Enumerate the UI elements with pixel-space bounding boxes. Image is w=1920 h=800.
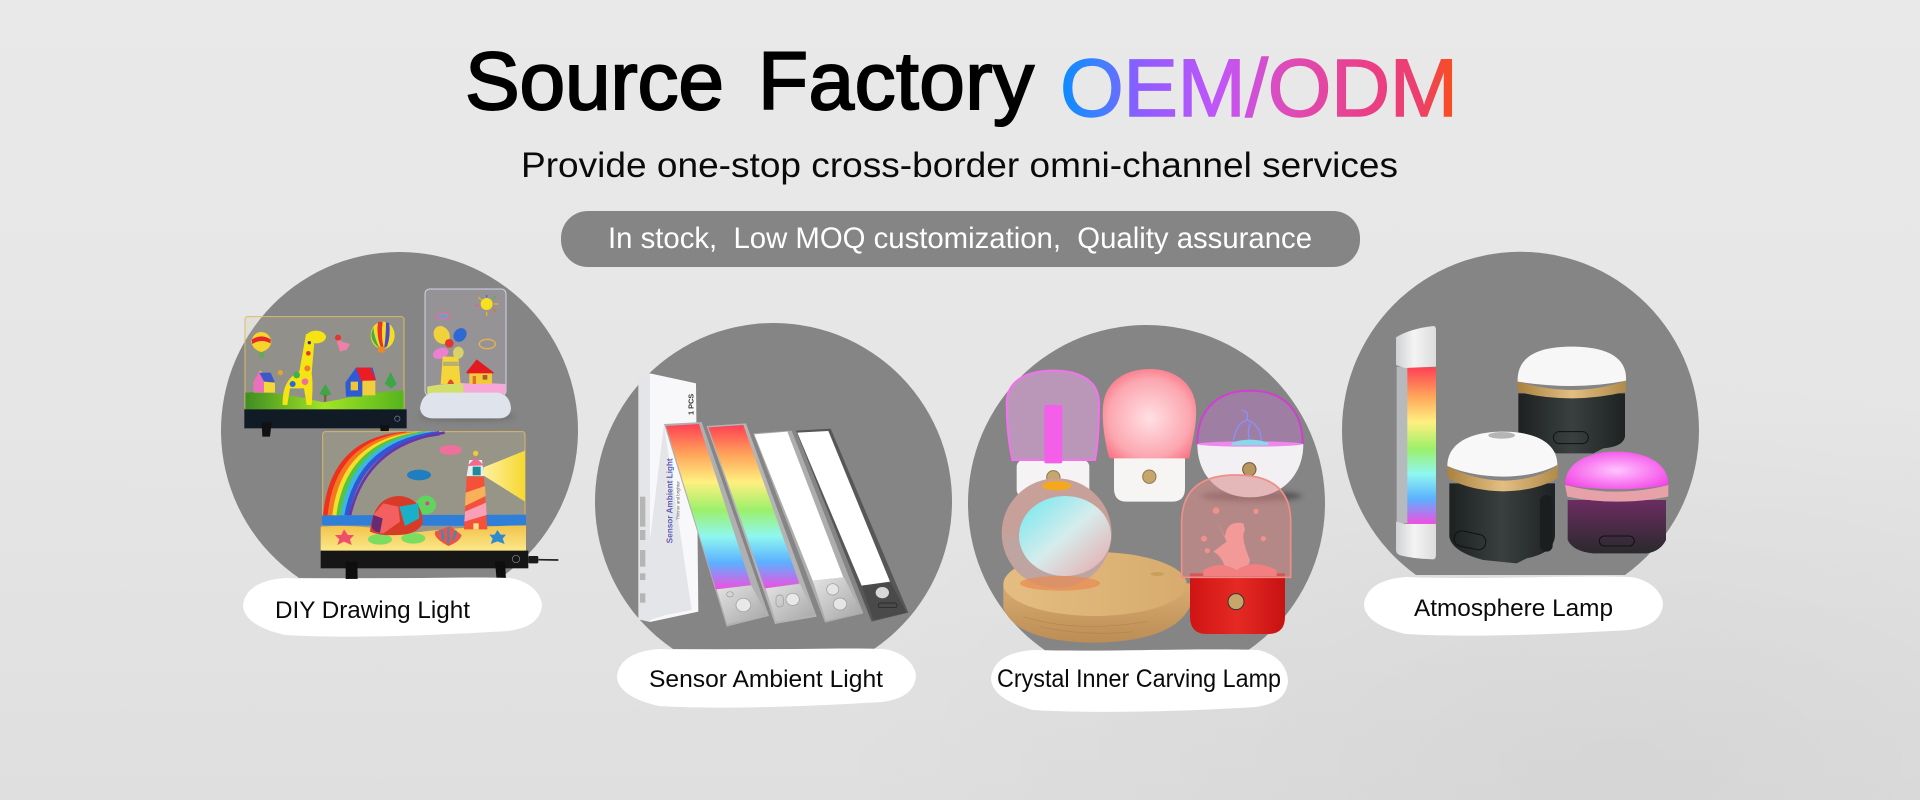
bar 3 — [753, 431, 863, 623]
base C — [321, 551, 528, 568]
title — [465, 36, 1458, 134]
panel: Sensor Ambient Light — [595, 323, 952, 708]
product: atmosphere lamps — [1396, 326, 1668, 563]
product: sensor bars and box: 1 PCS — [686, 394, 695, 415]
bar 2 — [707, 423, 817, 624]
gray circle — [221, 252, 578, 578]
crystal ball — [1002, 478, 1112, 591]
title: Factory — [758, 36, 1034, 127]
lamp C bowl — [1197, 391, 1303, 501]
gray circle — [968, 325, 1325, 651]
label: Sensor Ambient Light: Sensor Ambient Light — [649, 666, 883, 693]
box text: Sensor Ambient Light — [664, 458, 674, 543]
title: Source — [465, 36, 724, 127]
product: sensor bars and box — [638, 373, 908, 627]
panel A — [245, 317, 404, 410]
label: Sensor Ambient Light — [617, 649, 916, 708]
product: drawing lights — [244, 289, 558, 580]
panel B — [425, 289, 506, 396]
base A — [244, 409, 407, 428]
title: OEM/ODM gradient: OEM/ODM — [1060, 43, 1458, 134]
panel C — [323, 432, 525, 551]
box side marks — [640, 497, 645, 603]
base B — [420, 393, 511, 418]
gray circle — [1342, 252, 1699, 575]
wood base — [1003, 552, 1190, 643]
panel: DIY Drawing Light — [221, 252, 578, 637]
label: Crystal Inner Carving Lamp: Crystal Inner Carving Lamp — [997, 665, 1281, 693]
bar 4 — [796, 429, 908, 622]
lamp 2 front — [1447, 432, 1558, 563]
label: DIY Drawing Light — [243, 578, 542, 637]
lamp B coral — [1103, 369, 1196, 502]
pill banner — [561, 211, 1360, 267]
lamp 3 pink — [1565, 452, 1668, 553]
product: sensor bars and box: Thinner and brighter — [675, 480, 680, 520]
panel B shadow — [418, 413, 515, 421]
label: Crystal Inner Carving Lamp — [991, 649, 1288, 712]
label: Atmosphere Lamp — [1364, 577, 1663, 636]
product: crystal lamps — [1002, 369, 1303, 643]
box — [638, 373, 650, 622]
panel: Atmosphere Lamp — [1342, 252, 1699, 636]
label: Atmosphere Lamp: Atmosphere Lamp — [1414, 595, 1613, 622]
bar 1 — [664, 422, 769, 627]
gray circle — [595, 323, 952, 649]
panel: Crystal Inner Carving Lamp — [968, 325, 1325, 712]
lamp 1 white gold black — [1518, 347, 1626, 453]
pill text: In stock, Low MOQ customization, Quality assurance — [608, 222, 1312, 255]
lamp A clear pink — [1007, 371, 1099, 497]
lamp D red — [1182, 475, 1291, 634]
RGB tube — [1396, 326, 1436, 559]
subtitle: Provide one-stop cross-border omni-channel services — [521, 145, 1398, 185]
label: DIY Drawing Light: DIY Drawing Light — [275, 597, 470, 624]
